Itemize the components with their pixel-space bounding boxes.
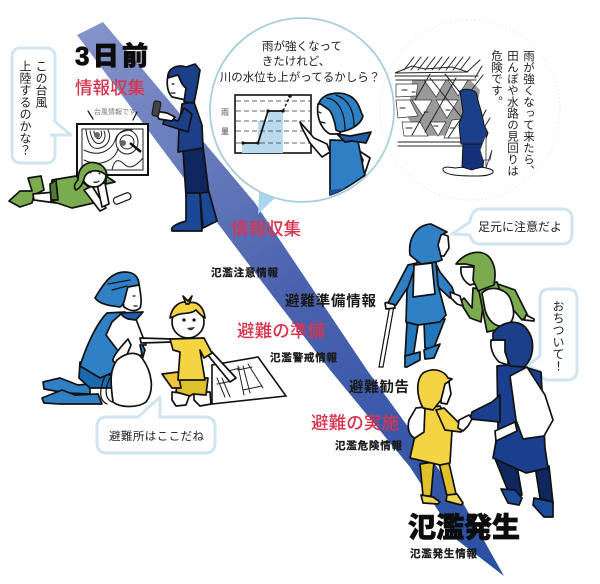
label: prepare for evacuation: 避難の準備 <box>237 321 325 341</box>
navy hiker <box>470 322 553 517</box>
remote control <box>113 192 132 205</box>
speech bubble: the shelter is here <box>97 397 215 453</box>
warning text <box>490 50 535 176</box>
girl lying on the floor <box>9 163 115 211</box>
torso <box>178 102 203 152</box>
speech bubble: the shelter is here: 避難所はここだね <box>109 429 204 443</box>
speech bubble: will the typhoon land <box>12 48 71 163</box>
speech bubble: watch your step <box>452 209 572 244</box>
blue hiker with walking stick <box>379 224 455 367</box>
legs <box>183 146 209 196</box>
thought bubble: woman with rainfall chart <box>210 18 394 214</box>
bubble text <box>220 39 380 84</box>
label: gather info (top): 情報収集 <box>75 78 145 98</box>
speech bubble: stay calm: おちついて！ <box>551 300 565 372</box>
navy hiker and yellow child holding hands <box>408 322 553 517</box>
bubble text: きたけれど、 <box>262 55 330 68</box>
arm and phone <box>163 108 192 132</box>
mother <box>42 272 172 406</box>
diagonal timeline band <box>77 22 504 576</box>
television with weather map: 台風情報です <box>94 107 136 116</box>
panel: typhoon at home <box>9 48 148 211</box>
speech bubble: will the typhoon land: 上陸するのかな？ <box>18 60 32 156</box>
green hiker <box>456 252 534 332</box>
person in raincoat with umbrella <box>443 89 493 176</box>
bubble text: 雨が強くなって <box>262 39 342 53</box>
rainfall line chart: 量 <box>221 127 229 136</box>
label: flood occurrence info: 氾濫発生情報 <box>410 547 478 560</box>
clasped hands <box>450 292 463 306</box>
television with weather map <box>77 107 148 175</box>
label: carry out evacuation: 避難の実施 <box>311 413 399 433</box>
timeline labels <box>75 41 520 560</box>
rainy rice paddy illustration <box>395 57 490 146</box>
label: flood warning info: 氾濫警戒情報 <box>270 351 338 364</box>
speech bubble: will the typhoon land: この台風 <box>34 60 48 108</box>
panel: do not check paddies in rain <box>380 20 560 200</box>
faint dotted circle <box>380 20 560 200</box>
warning text: 田んぼや水路の見回りは <box>506 50 519 176</box>
speech bubble: stay calm <box>527 289 577 380</box>
hazard map <box>212 357 286 404</box>
mother and child with hazard map <box>42 272 286 406</box>
bubble text: 川の水位も上がってるかしら？ <box>220 70 380 84</box>
clasped hands <box>458 415 472 431</box>
hikers helping each other <box>379 224 534 367</box>
label: evacuation prep info: 避難準備情報 <box>285 292 376 310</box>
warning text: 雨が強くなって来たら、 <box>522 50 535 176</box>
head <box>167 75 188 100</box>
heading: 3 days before: 3日前 <box>75 41 148 71</box>
label: gather info (band): 情報収集 <box>231 219 301 239</box>
yellow child <box>408 370 463 505</box>
label: flood danger info: 氾濫危険情報 <box>335 439 402 452</box>
speech bubble: watch your step: 足元に注意だよ <box>478 220 562 234</box>
label: flood caution info: 氾濫注意情報 <box>211 266 278 279</box>
rainfall line chart <box>221 94 311 153</box>
boy <box>162 296 236 406</box>
rainfall line chart: 雨 <box>221 108 229 117</box>
warning text: 危険です。 <box>490 50 503 108</box>
man using smartphone <box>152 64 217 231</box>
label: evacuation advisory: 避難勧告 <box>349 378 409 396</box>
heading: flood occurs: 氾濫発生 <box>408 512 520 543</box>
woman pointing <box>300 93 371 196</box>
